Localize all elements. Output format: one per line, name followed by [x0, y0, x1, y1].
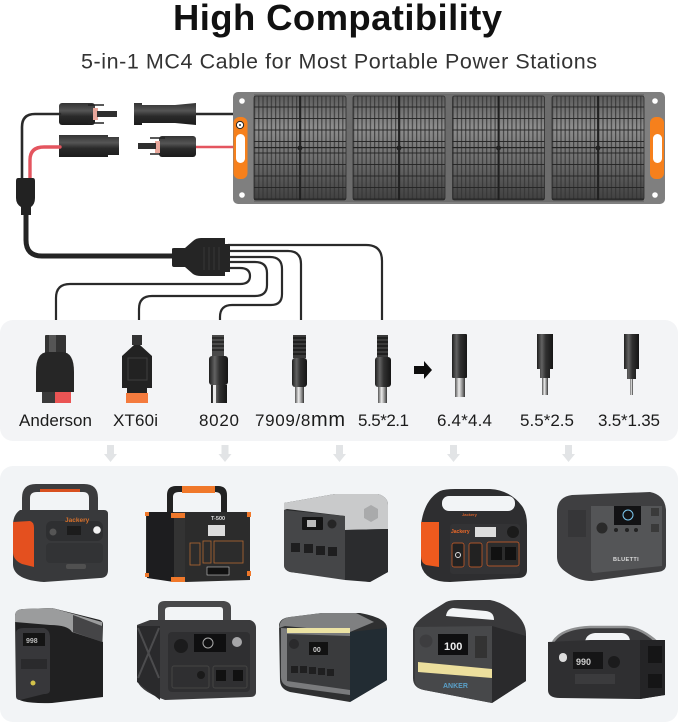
- label: Anderson: Anderson: [19, 411, 92, 430]
- station: EcoFlow Delta: [15, 608, 103, 703]
- label: 5.5*2.1: 5.5*2.1: [358, 411, 409, 430]
- station: Jackery 2: Jackery: [451, 529, 470, 535]
- label: XT60i: XT60i: [113, 411, 158, 430]
- input cables to splitter: [22, 114, 174, 256]
- subtitle: 5-in-1 MC4 Cable for Most Portable Power Stations: [81, 50, 597, 74]
- solar module 3: [452, 96, 544, 200]
- adapter: 3.5*1.35: [624, 334, 639, 395]
- hub splitter: [172, 238, 230, 276]
- station: EcoFlow Delta: 998: [26, 638, 38, 645]
- mounting holes: [239, 98, 658, 198]
- panel cables: [195, 114, 233, 147]
- MC4 connector: bottom right: [138, 136, 196, 157]
- station: Jackery 1: Jackery: [65, 517, 90, 524]
- connector: 5.5*2.1: [375, 335, 391, 403]
- station: Jackery 2: [421, 489, 527, 582]
- right orange handle: [650, 117, 664, 179]
- connector: 8020: [209, 335, 228, 403]
- station: River: 990: [576, 657, 591, 667]
- station: Bluetti EB: [137, 601, 256, 700]
- station: Anker 521: ANKER: [443, 683, 468, 690]
- icons: down arrows: [104, 445, 575, 462]
- station: T-500: T-500: [211, 516, 225, 522]
- connector: 7909/8mm: [292, 335, 307, 403]
- output cables: [56, 245, 382, 322]
- station: Anker C: 00: [313, 647, 321, 654]
- station: Anker C: [279, 613, 387, 702]
- panel: power stations: [0, 466, 678, 722]
- connector: Anderson: [36, 335, 74, 403]
- icon: arrow: [414, 361, 432, 379]
- solar module 1: [254, 96, 346, 200]
- label: 8020: 8020: [199, 411, 239, 430]
- label: 5.5*2.5: 5.5*2.5: [520, 411, 574, 430]
- adapter: 5.5*2.5: [537, 334, 553, 395]
- station: Anker 521: 100: [444, 641, 462, 653]
- station: Jackery 2: Jackery: [462, 512, 478, 517]
- station: EcoFlow: [284, 494, 388, 582]
- solar panel: [233, 92, 665, 204]
- label: 6.4*4.4: 6.4*4.4: [437, 411, 492, 430]
- station: Bluetti 1: [557, 492, 666, 581]
- label: 7909/8mm: 7909/8mm: [255, 409, 345, 431]
- solar module 2: [353, 96, 445, 200]
- adapter: 6.4*4.4: [452, 334, 467, 397]
- Y splitter: [16, 178, 35, 215]
- station: Bluetti 1: BLUETTI: [613, 557, 639, 563]
- MC4 connector: bottom left: [59, 135, 119, 157]
- connector: XT60i: [122, 335, 152, 403]
- station: River: [548, 627, 665, 699]
- left orange handle: [234, 117, 248, 179]
- station: T-500: [145, 486, 251, 582]
- station: Jackery 1: [13, 484, 108, 582]
- solar module 4: [552, 96, 644, 200]
- MC4 connector: top right: [134, 103, 196, 125]
- MC4 connector: top left: [59, 103, 117, 125]
- label: 3.5*1.35: 3.5*1.35: [598, 411, 660, 430]
- panel: connectors: [0, 320, 678, 441]
- station: Anker 521: [413, 600, 526, 703]
